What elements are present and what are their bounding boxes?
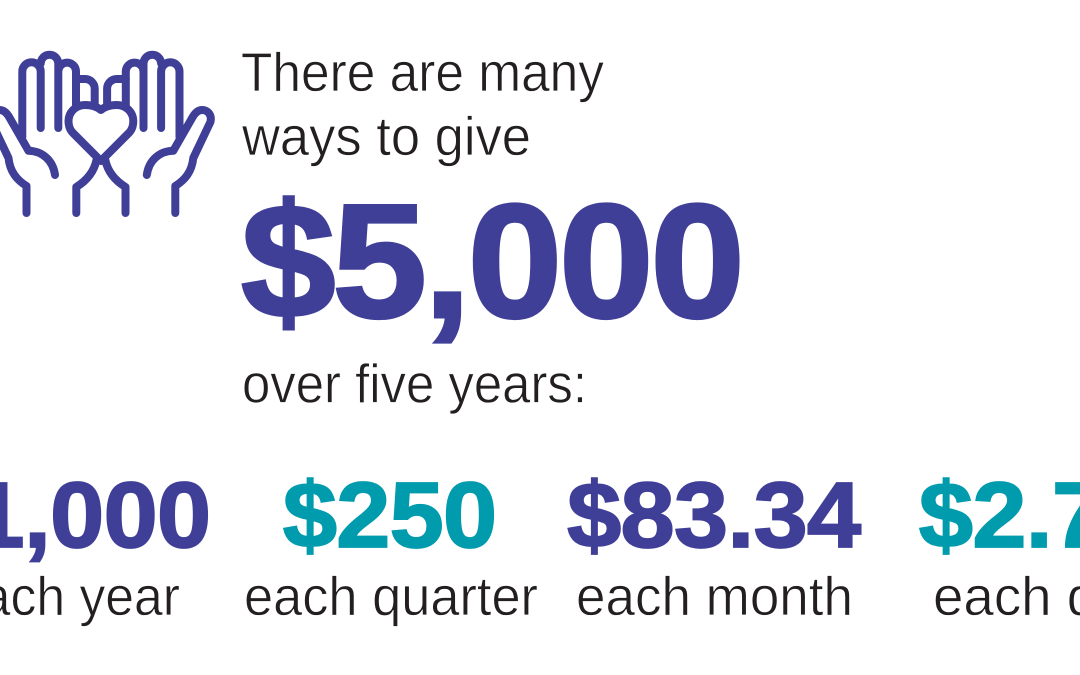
- headline amount: $5,000: [241, 172, 742, 352]
- option: daily: [919, 464, 1080, 627]
- option: yearly: [0, 464, 210, 627]
- icon: heart: [68, 105, 133, 161]
- option: monthly: $83.34: [567, 464, 861, 567]
- icon: right hand: [105, 55, 211, 213]
- heading: ways to give: [241, 105, 531, 167]
- option: monthly: each month: [576, 565, 853, 627]
- icon: left hand: [0, 55, 96, 213]
- icon: two hands holding a heart: [0, 55, 211, 213]
- heading: [241, 41, 604, 167]
- heading: There are many: [241, 41, 604, 103]
- subheading: over five years:: [242, 352, 587, 414]
- option: monthly: [567, 464, 861, 627]
- option: quarterly: $250: [283, 464, 496, 567]
- option: quarterly: each quarter: [244, 565, 538, 627]
- option: quarterly: [244, 464, 538, 627]
